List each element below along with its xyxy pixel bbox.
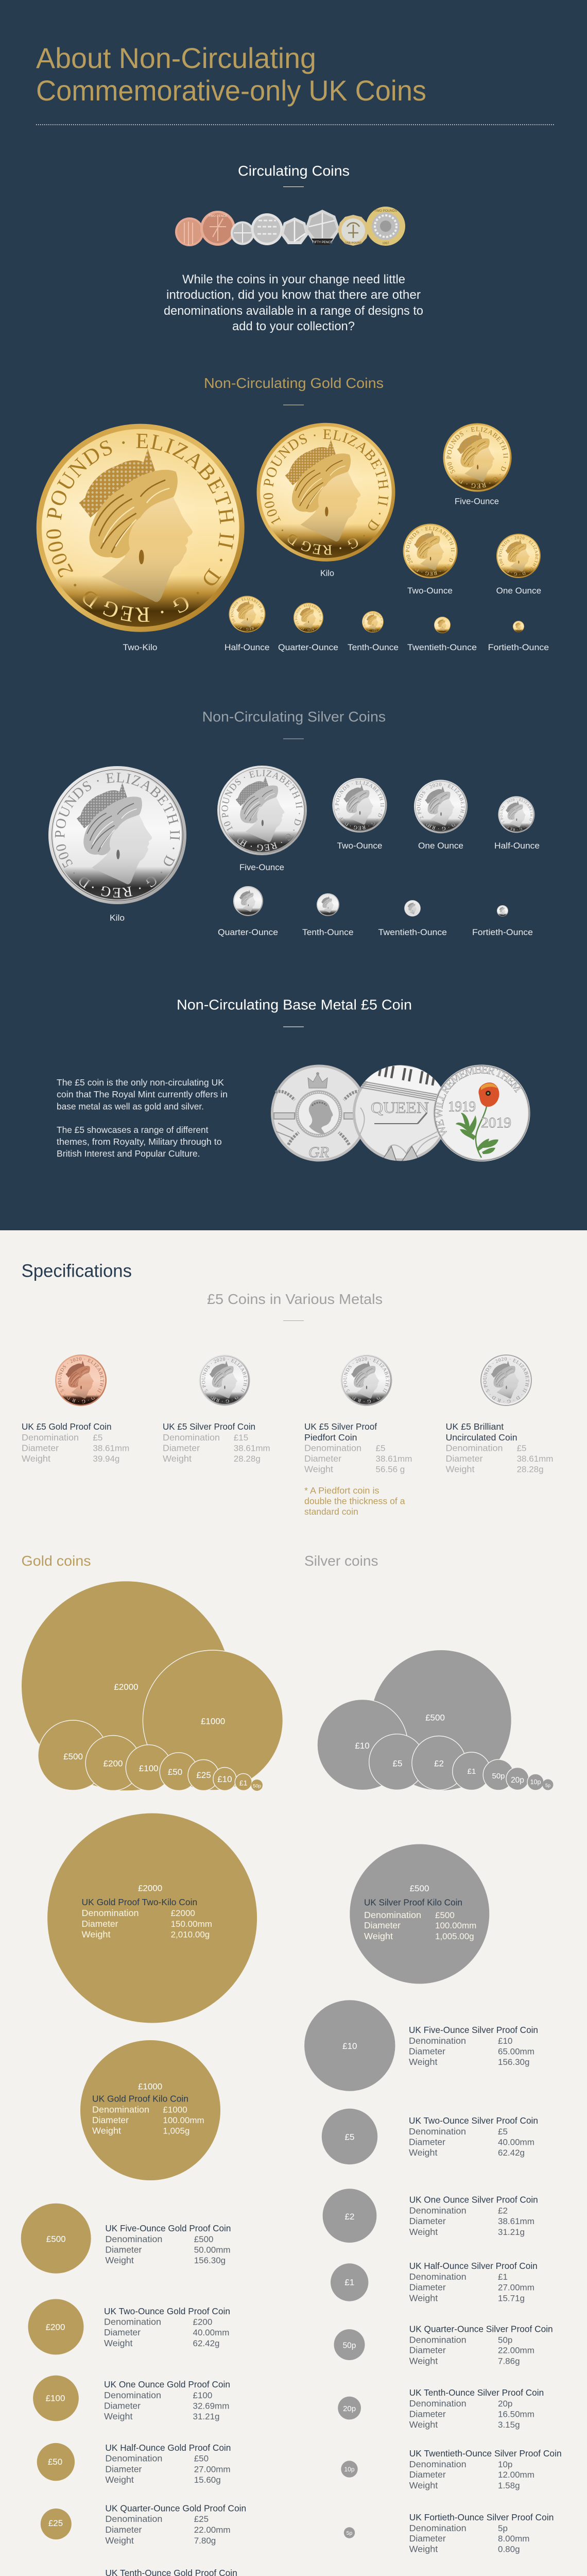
gold quarter-ounce spec: Weight (105, 2535, 134, 2546)
panel: 5 pound silver proof piedfort coin: UK £5 Silver Proof (304, 1421, 377, 1432)
icon: 2p coin (200, 211, 235, 246)
gold one-ounce spec: UK One Ounce Gold Proof Coin (104, 2379, 230, 2389)
silver half-ounce spec: UK Half-Ounce Silver Proof Coin (409, 2261, 538, 2271)
silver fortieth-ounce spec: 0.80g (498, 2545, 520, 2554)
gold coin labels: Fortieth-Ounce (488, 642, 549, 652)
panel: 5 pound silver proof coin: Denomination (163, 1432, 220, 1443)
silver tenth-ounce spec: Denomination (409, 2398, 467, 2409)
gold one-ounce spec: 32.69mm (193, 2401, 229, 2411)
silver coin labels: Tenth-Ounce (302, 927, 353, 937)
silver one-ounce spec: 38.61mm (498, 2216, 534, 2226)
bubble chart: silver coin sizes: 10p (530, 1778, 541, 1786)
silver tenth-ounce spec: 16.50mm (498, 2409, 534, 2419)
intro text block: denominations available in a range of designs to (164, 304, 423, 318)
silver five-ounce spec: UK Five-Ounce Silver Proof Coin (409, 2025, 538, 2035)
title: Commemorative-only UK Coins (36, 74, 426, 107)
gold half-ounce spec: UK Half-Ounce Gold Proof Coin (105, 2443, 231, 2453)
gold five-ounce spec: Denomination (105, 2234, 162, 2244)
text block: about the 5 pound coin (57, 1077, 228, 1159)
silver five-ounce spec: 65.00mm (498, 2046, 534, 2056)
gold two-kilo spec bubble: 150.00mm (171, 1919, 212, 1929)
bubble chart: gold coin sizes: £100 (139, 1764, 159, 1773)
panel: 5 pound silver proof coin: 28.28g (234, 1454, 261, 1464)
bubble chart: gold coin sizes: £1000 (201, 1717, 225, 1726)
silver one-ounce spec: Denomination (409, 2205, 467, 2215)
text block: about the 5 pound coin: British Interest and Popular Culture. (57, 1148, 200, 1159)
silver one-ounce spec (323, 2189, 538, 2243)
icon: gold tenth-ounce coin: D · 10 POUNDS · ELIZABETH II · D · G · REG · F · (363, 612, 382, 632)
silver two-ounce spec: Diameter (409, 2137, 445, 2147)
silver twentieth-ounce spec (341, 2448, 562, 2490)
silver two-ounce spec (322, 2109, 538, 2164)
gold quarter-ounce spec: Diameter (105, 2524, 142, 2535)
gold one-ounce spec: £100 (46, 2394, 65, 2403)
gold one-ounce spec: Weight (104, 2411, 133, 2421)
gold coin labels: Twentieth-Ounce (407, 642, 477, 652)
silver twentieth-ounce spec: 10p (498, 2460, 512, 2469)
icon: silver tenth-ounce coin (317, 893, 339, 916)
panel: 5 pound brilliant uncirculated coin: £5 (517, 1444, 527, 1453)
icon: remembrance poppy coin: WE WILL REMEMBER THEM (435, 1065, 522, 1138)
silver coin labels: One Ounce (418, 841, 463, 851)
silver two-ounce spec: 62.42g (498, 2148, 525, 2158)
silver quarter-ounce spec: 7.86g (498, 2357, 520, 2366)
gold five-ounce spec: £500 (194, 2234, 214, 2244)
silver one-ounce spec: UK One Ounce Silver Proof Coin (409, 2195, 538, 2205)
icon: 20p coin (281, 217, 308, 244)
gold kilo spec bubble: 100.00mm (163, 2115, 204, 2125)
icon: gold two-ounce coin: D · 200 POUNDS · ELIZABETH II · D · G · REG · F · (406, 527, 455, 575)
gold half-ounce spec: 27.00mm (194, 2464, 231, 2474)
gold five-ounce spec: 50.00mm (194, 2245, 231, 2255)
panel: 5 pound brilliant uncirculated coin: Uncirculated Coin (446, 1432, 517, 1443)
panel: 5 pound silver proof coin: UK £5 Silver Proof Coin (163, 1421, 255, 1432)
silver tenth-ounce spec: Diameter (409, 2409, 446, 2419)
silver fortieth-ounce spec: Diameter (409, 2533, 446, 2544)
panel: 5 pound silver proof piedfort coin: £5 (376, 1444, 385, 1453)
gold one-ounce spec: 31.21g (193, 2412, 219, 2421)
icon: gold five-ounce coin: D · 500 POUNDS · ELIZABETH II · D · G · REG · F · (447, 427, 508, 488)
icon: royalty coin (271, 1064, 368, 1161)
icon: silver kilo coin: D · 500 POUNDS · ELIZABETH II · D · G · REG · F · (55, 773, 180, 897)
silver tenth-ounce spec: 3.15g (498, 2420, 520, 2430)
heading: silver coins chart: Silver coins (304, 1553, 378, 1569)
piedfort footnote: * A Piedfort coin is (304, 1485, 379, 1496)
text block: about the 5 pound coin: coin that The Royal Mint currently offers in (57, 1089, 228, 1099)
panel: 5 pound silver proof piedfort coin: 38.61mm (376, 1454, 412, 1464)
gold kilo spec bubble: £1000 (163, 2105, 187, 2115)
gold two-ounce spec: Denomination (104, 2316, 161, 2327)
text block: about the 5 pound coin: themes, from Royalty, Military through to (57, 1137, 222, 1147)
silver kilo spec bubble: 1,005.00g (435, 1931, 474, 1941)
intro text block: introduction, did you know that there are other (166, 288, 421, 302)
icon: 1 pound coin (338, 215, 369, 246)
gold kilo spec bubble (80, 2040, 220, 2180)
bubble chart: silver coin sizes: £10 (355, 1741, 370, 1751)
silver two-ounce spec: £5 (345, 2132, 354, 2142)
silver kilo spec bubble (350, 1844, 489, 1984)
silver coin labels (110, 841, 540, 937)
heading: circulating coins: Circulating Coins (238, 163, 350, 179)
panel: 5 pound gold proof coin: D · 5 POUNDS · 2020 · ELIZABETH II · D · G · REG (58, 1357, 104, 1403)
panel: 5 pound brilliant uncirculated coin: UK £5 Brilliant (446, 1421, 504, 1432)
heading: base metal coin: Non-Circulating Base Metal £5 Coin (177, 996, 412, 1013)
gold coin labels (123, 497, 549, 652)
gold quarter-ounce spec: 7.80g (194, 2536, 216, 2546)
silver tenth-ounce spec: Weight (409, 2419, 438, 2430)
silver kilo spec bubble: Diameter (364, 1920, 401, 1930)
gold quarter-ounce spec: Denomination (105, 2514, 162, 2524)
bubble chart: gold coin sizes: £1 (239, 1778, 248, 1787)
text block: about the 5 pound coin: base metal as well as gold and silver. (57, 1101, 204, 1112)
gold one-ounce spec: Diameter (104, 2401, 141, 2411)
panel: 5 pound gold proof coin: £5 (93, 1433, 102, 1443)
bubble chart: silver coin sizes: £1 (468, 1767, 476, 1776)
text block: about the 5 pound coin: The £5 showcases a range of different (57, 1125, 209, 1135)
panel: 5 pound brilliant uncirculated coin: 28.28g (517, 1464, 544, 1475)
gold coin labels: Half-Ounce (225, 642, 270, 652)
panel: 5 pound gold proof coin (22, 1354, 129, 1464)
silver twentieth-ounce spec: 1.58g (498, 2481, 520, 2490)
gold coin labels: Quarter-Ounce (278, 642, 338, 652)
gold quarter-ounce spec: 22.00mm (194, 2525, 231, 2535)
silver fortieth-ounce spec: Weight (409, 2544, 438, 2554)
heading: gold coins chart: Gold coins (22, 1553, 91, 1569)
panel: 5 pound brilliant uncirculated coin (446, 1354, 553, 1475)
title (36, 42, 426, 107)
icon: gold twentieth-ounce coin (434, 617, 451, 633)
silver kilo spec bubble: Denomination (364, 1910, 421, 1920)
panel: 5 pound silver proof coin: £15 (234, 1433, 248, 1443)
gold two-kilo spec bubble: £2000 (138, 1884, 162, 1893)
intro text block: add to your collection? (232, 319, 355, 333)
silver quarter-ounce spec: UK Quarter-Ounce Silver Proof Coin (409, 2324, 553, 2334)
panel: 5 pound silver proof piedfort coin: Diameter (304, 1453, 341, 1464)
bubble chart: gold coin sizes: £200 (103, 1759, 123, 1768)
text block: about the 5 pound coin: The £5 coin is the only non-circulating UK (57, 1077, 224, 1088)
silver one-ounce spec: £2 (498, 2206, 508, 2215)
bubble chart: gold coin sizes: £50 (168, 1767, 182, 1777)
gold two-kilo spec bubble: UK Gold Proof Two-Kilo Coin (81, 1897, 197, 1907)
panel: 5 pound gold proof coin: Weight (22, 1453, 50, 1464)
silver five-ounce spec: £10 (498, 2036, 512, 2046)
icon: remembrance poppy coin: 1919 (448, 1098, 476, 1115)
silver half-ounce spec: 27.00mm (498, 2283, 534, 2293)
silver half-ounce spec: £1 (498, 2272, 508, 2282)
panel: 5 pound brilliant uncirculated coin: 38.61mm (517, 1454, 553, 1464)
silver quarter-ounce spec: 50p (498, 2335, 512, 2345)
silver half-ounce spec: £1 (344, 2278, 354, 2287)
gold five-ounce spec: Weight (105, 2255, 134, 2265)
silver one-ounce spec: Weight (409, 2227, 438, 2237)
panel: base metal coins (271, 1064, 530, 1161)
gold half-ounce spec: 15.60g (194, 2475, 221, 2485)
icon: gold one-ounce coin: D · 100 POUNDS · 2020 · ELIZABETH II · D · G · REG (498, 536, 539, 575)
bubble chart: silver coin sizes (317, 1650, 553, 1790)
panel: navy introduction background (0, 0, 587, 1230)
panel: 5 pound silver proof piedfort coin: Denomination (304, 1443, 361, 1453)
piedfort footnote: standard coin (304, 1506, 358, 1517)
gold coin labels: One Ounce (496, 586, 541, 596)
gold one-ounce spec: Denomination (104, 2390, 161, 2400)
silver one-ounce spec: £2 (345, 2212, 354, 2222)
gold two-ounce spec: Diameter (104, 2327, 141, 2337)
icon: gold two-kilo coin: D · 2000 POUNDS · ELIZABETH II · D · G · REG · F · (46, 434, 235, 622)
gold kilo spec bubble: 1,005g (163, 2126, 189, 2136)
bubble chart: silver coin sizes: £5 (393, 1759, 402, 1768)
silver fortieth-ounce spec: 5p (347, 2530, 352, 2536)
gold quarter-ounce spec (41, 2503, 246, 2546)
panel: 5 pound gold proof coin: Diameter (22, 1443, 59, 1453)
gold two-kilo spec bubble: Denomination (81, 1908, 139, 1918)
gold coin labels: Two-Kilo (123, 642, 158, 652)
intro text block (164, 273, 423, 333)
silver five-ounce spec: 156.30g (498, 2057, 529, 2067)
silver twentieth-ounce spec: UK Twentieth-Ounce Silver Proof Coin (409, 2448, 562, 2459)
gold half-ounce spec: Weight (105, 2475, 134, 2485)
bubble chart: gold coin sizes: £500 (63, 1752, 83, 1761)
silver coin labels: Five-Ounce (239, 862, 284, 872)
icon: silver twentieth-ounce coin (404, 900, 421, 917)
icon: 50p coin: FIFTY PENCE (313, 241, 332, 244)
silver kilo spec bubble: £500 (410, 1884, 429, 1893)
panel: 5 pound silver proof piedfort coin: D · 5 POUNDS · 2020 · ELIZABETH II · D · G · REG (343, 1357, 389, 1403)
silver one-ounce spec: 31.21g (498, 2227, 525, 2237)
gold two-ounce spec: £200 (46, 2323, 65, 2332)
gold quarter-ounce spec: £25 (48, 2518, 63, 2528)
gold five-ounce spec (21, 2204, 231, 2274)
icon: 5p coin (231, 222, 254, 245)
gold coin labels: Tenth-Ounce (348, 642, 399, 652)
bubble chart: silver coin sizes: 20p (511, 1776, 524, 1785)
icon: 10p coin (251, 213, 283, 245)
silver five-ounce spec: Diameter (409, 2046, 445, 2056)
panel: 5 pound gold proof coin: 39.94g (93, 1454, 119, 1464)
gold five-ounce spec: 156.30g (194, 2256, 226, 2265)
silver two-ounce spec: Denomination (409, 2126, 466, 2137)
gold two-ounce spec: 62.42g (193, 2338, 219, 2348)
silver half-ounce spec: Weight (409, 2293, 438, 2303)
heading: gold coins: Non-Circulating Gold Coins (204, 375, 384, 391)
gold kilo spec bubble: UK Gold Proof Kilo Coin (92, 2094, 188, 2104)
panel: 5 pound gold proof coin: 38.61mm (93, 1444, 129, 1453)
bubble chart: gold coin sizes: £25 (196, 1770, 211, 1780)
bubble chart: silver coin sizes: 50p (492, 1772, 505, 1781)
icon: 1p coin (175, 217, 204, 246)
silver fortieth-ounce spec: 5p (498, 2523, 508, 2533)
silver two-ounce spec: Weight (409, 2147, 438, 2158)
gold two-kilo spec bubble: £2000 (171, 1908, 195, 1918)
silver half-ounce spec: Diameter (409, 2282, 446, 2293)
panel: 5 pound silver proof coin: D · 5 POUNDS · 2020 · ELIZABETH II · D · G · REG (202, 1357, 247, 1403)
silver twentieth-ounce spec: Weight (409, 2480, 438, 2490)
bubble chart: silver coin sizes: £2 (434, 1759, 444, 1768)
gold two-kilo spec bubble (47, 1814, 257, 2023)
silver twentieth-ounce spec: 12.00mm (498, 2470, 534, 2480)
gold two-ounce spec: £200 (193, 2317, 212, 2327)
panel: 5 pound brilliant uncirculated coin: Diameter (446, 1453, 483, 1464)
panel: 5 pound silver proof coin: Weight (163, 1453, 192, 1464)
silver five-ounce spec: £10 (342, 2041, 357, 2051)
gold half-ounce spec: Diameter (105, 2464, 142, 2474)
silver quarter-ounce spec (334, 2324, 553, 2366)
silver tenth-ounce spec (338, 2387, 544, 2430)
bubble chart: gold coin sizes (22, 1581, 283, 1791)
silver coin labels: Two-Ounce (337, 841, 382, 851)
icon: gold fortieth-ounce coin (513, 621, 524, 632)
gold kilo spec bubble: Denomination (92, 2105, 149, 2115)
silver fortieth-ounce spec: Denomination (409, 2523, 467, 2533)
icon: royalty coin: GR (308, 1144, 329, 1161)
gold two-kilo spec bubble: Diameter (81, 1919, 118, 1929)
title: About Non-Circulating (36, 42, 316, 74)
panel: 5 pound gold proof coin: UK £5 Gold Proof Coin (22, 1421, 111, 1432)
gold one-ounce spec (33, 2376, 230, 2421)
gold two-ounce spec: UK Two-Ounce Gold Proof Coin (104, 2306, 230, 2316)
bubble chart: gold coin sizes: £10 (217, 1774, 232, 1784)
intro text block: While the coins in your change need little (182, 273, 405, 286)
gold five-ounce spec: Diameter (105, 2244, 142, 2255)
icon: Queen coin: QUEEN (371, 1098, 429, 1116)
icon: 2p coin: TWO PENCE (209, 215, 227, 218)
silver tenth-ounce spec: 20p (498, 2399, 512, 2409)
silver two-ounce spec: 40.00mm (498, 2137, 534, 2147)
gold five-ounce spec: £500 (46, 2234, 66, 2244)
icon: 2 pound coin: TWO POUNDS (374, 209, 398, 213)
icon: silver fortieth-ounce coin (497, 905, 508, 917)
silver half-ounce spec: Denomination (409, 2272, 467, 2282)
piedfort footnote: double the thickness of a (304, 1496, 405, 1506)
panel: 5 pound brilliant uncirculated coin: Denomination (446, 1443, 503, 1453)
bubble chart: gold coin sizes: £2000 (114, 1682, 139, 1692)
silver coin labels: Kilo (110, 913, 125, 923)
icon: silver one-ounce coin: D · 2 POUNDS · 2020 · ELIZABETH II · D · G · REG (417, 783, 464, 831)
silver kilo spec bubble: Weight (364, 1931, 393, 1941)
circulating coin row (175, 207, 405, 246)
panel: 5 pound silver proof coin: Diameter (163, 1443, 200, 1453)
icon: silver two-ounce coin: DEF · 5 POUNDS · ELIZABETH II · D · G · REG · F · (335, 781, 384, 829)
silver kilo spec bubble: 100.00mm (435, 1921, 476, 1930)
icon: silver half-ounce coin: D · 1 POUND · 2020 · ELIZABETH II · D · G · REG (500, 799, 533, 831)
icon: remembrance poppy coin: 2019 (481, 1115, 511, 1131)
silver coin labels: Twentieth-Ounce (378, 927, 447, 937)
icon: silver five-ounce coin: D · 10 POUNDS · ELIZABETH II · D · G · REG · F · (221, 770, 303, 851)
gold half-ounce spec: £50 (48, 2457, 62, 2467)
silver five-ounce spec (304, 2000, 538, 2091)
icon: gold quarter-ounce coin: D · 25 POUNDS · ELIZABETH II · D · G · REG · F · (295, 604, 322, 631)
silver coin labels: Fortieth-Ounce (472, 927, 533, 937)
silver five-ounce spec: Weight (409, 2057, 438, 2067)
icon: remembrance poppy coin (434, 1064, 530, 1161)
icon: gold half-ounce coin: D · 50 POUNDS · ELIZABETH II · D · G · REG · F · (231, 598, 264, 631)
silver tenth-ounce spec: 20p (343, 2404, 356, 2413)
gold coin labels: Two-Ounce (407, 586, 453, 596)
heading: 5 pound coins in various metals: £5 Coins in Various Metals (207, 1291, 383, 1307)
icon: 50p coin (305, 210, 340, 245)
gold one-ounce spec: £100 (193, 2391, 212, 2400)
panel: 5 pound brilliant uncirculated coin: Weight (446, 1464, 475, 1475)
silver one-ounce spec: Diameter (409, 2216, 446, 2226)
silver two-ounce spec: £5 (498, 2127, 508, 2137)
silver quarter-ounce spec: Denomination (409, 2334, 467, 2345)
heading: specifications: Specifications (22, 1261, 132, 1281)
icon: 1 pound coin: ONE POUND (344, 242, 362, 245)
piedfort footnote (304, 1485, 405, 1517)
gold two-ounce spec: Weight (104, 2338, 133, 2348)
gold two-ounce spec: 40.00mm (193, 2328, 229, 2337)
bubble chart: gold coin sizes: 50p (253, 1784, 261, 1789)
silver five-ounce spec: Denomination (409, 2036, 466, 2046)
panel: 5 pound silver proof piedfort coin (304, 1354, 412, 1517)
gold half-ounce spec (37, 2443, 231, 2485)
gold two-ounce spec (28, 2299, 230, 2354)
silver twentieth-ounce spec: Denomination (409, 2459, 467, 2469)
silver coin labels: Quarter-Ounce (218, 927, 278, 937)
gold two-kilo spec bubble: Weight (81, 1929, 111, 1939)
gold kilo spec bubble: £1000 (138, 2081, 162, 2092)
panel: silver coin images (48, 766, 534, 917)
icon: silver quarter-ounce coin (233, 886, 263, 916)
panel: 5 pound silver proof piedfort coin: Piedfort Coin (304, 1432, 357, 1443)
silver twentieth-ounce spec: Diameter (409, 2469, 446, 2480)
panel: gold coin images (36, 422, 541, 633)
silver fortieth-ounce spec: 8.00mm (498, 2534, 529, 2544)
bubble chart: silver coin sizes: 5p (545, 1783, 550, 1788)
gold coin labels: Kilo (320, 568, 334, 578)
silver quarter-ounce spec: 22.00mm (498, 2346, 534, 2355)
panel: 5 pound silver proof coin (163, 1355, 270, 1464)
gold kilo spec bubble: Weight (92, 2126, 121, 2136)
gold quarter-ounce spec: UK Quarter-Ounce Gold Proof Coin (105, 2503, 246, 2514)
icon: 2 pound coin: 1997 (382, 242, 389, 245)
silver fortieth-ounce spec (344, 2512, 554, 2554)
silver kilo spec bubble: £500 (435, 1910, 455, 1920)
silver twentieth-ounce spec: 10p (344, 2466, 355, 2473)
icon: Queen coin (353, 1065, 441, 1161)
gold quarter-ounce spec: £25 (194, 2514, 209, 2524)
gold five-ounce spec: UK Five-Ounce Gold Proof Coin (105, 2223, 231, 2233)
icon: 2 pound coin (366, 207, 405, 246)
panel: 5 pound gold proof coin: Denomination (22, 1432, 79, 1443)
silver coin labels: Half-Ounce (494, 841, 540, 851)
silver half-ounce spec (331, 2261, 538, 2303)
silver quarter-ounce spec: Diameter (409, 2345, 446, 2355)
icon: gold kilo coin: D · 1000 POUNDS · ELIZABETH II · D · G · REG · F · (264, 430, 388, 555)
panel: 5 pound silver proof coin: 38.61mm (234, 1444, 270, 1453)
silver half-ounce spec: 15.71g (498, 2294, 525, 2303)
gold half-ounce spec: Denomination (105, 2453, 162, 2464)
gold coin labels: Five-Ounce (455, 497, 499, 506)
gold half-ounce spec: £50 (194, 2454, 209, 2464)
silver tenth-ounce spec: UK Tenth-Ounce Silver Proof Coin (409, 2387, 544, 2398)
panel: 5 pound silver proof piedfort coin: Weight (304, 1464, 333, 1475)
silver quarter-ounce spec: Weight (409, 2356, 438, 2366)
panel: 5 pound silver proof piedfort coin: 56.56 g (376, 1464, 405, 1475)
silver two-ounce spec: UK Two-Ounce Silver Proof Coin (409, 2115, 538, 2126)
bubble chart: silver coin sizes: £500 (425, 1713, 445, 1723)
panel: 5 pound brilliant uncirculated coin: D · 5 POUNDS · 2020 · ELIZABETH II · D · G · REG (483, 1357, 529, 1403)
heading: silver coins: Non-Circulating Silver Coins (202, 709, 386, 724)
gold two-kilo spec bubble: 2,010.00g (171, 1930, 210, 1939)
silver quarter-ounce spec: 50p (343, 2341, 356, 2350)
silver kilo spec bubble: UK Silver Proof Kilo Coin (364, 1897, 462, 1908)
silver fortieth-ounce spec: UK Fortieth-Ounce Silver Proof Coin (409, 2512, 554, 2522)
gold kilo spec bubble: Diameter (92, 2115, 129, 2125)
